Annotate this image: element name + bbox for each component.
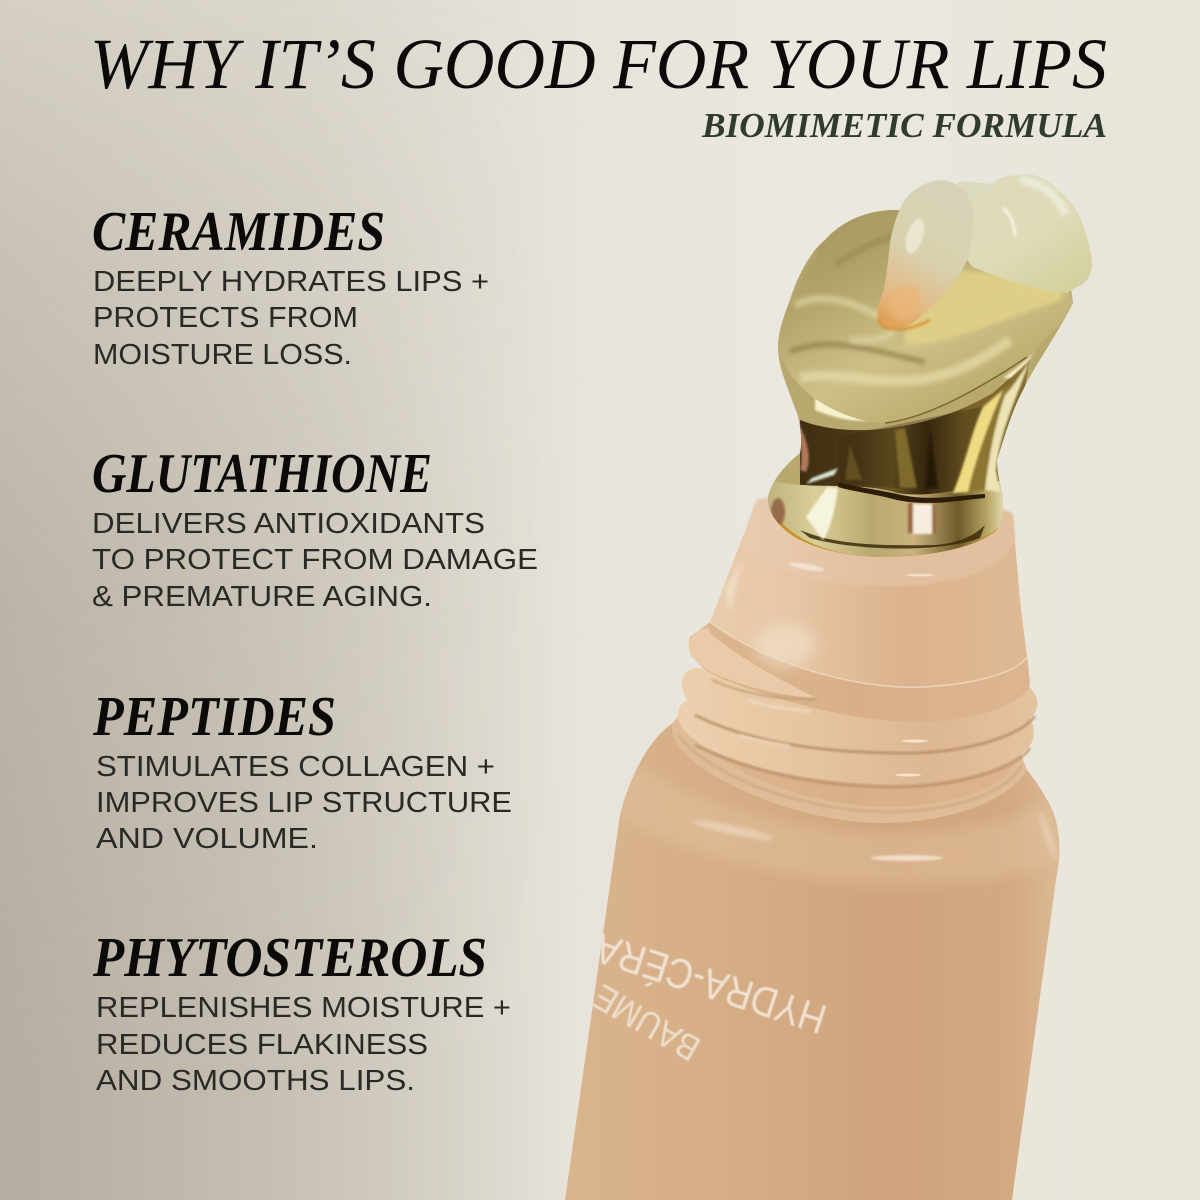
text: glutathione description: & PREMATURE AGING. (92, 581, 432, 613)
product: lip balm tube (565, 174, 1092, 1200)
shoulder collar (672, 700, 1027, 823)
ring 3 (678, 700, 1034, 784)
shoulder and neck rings (672, 622, 1038, 823)
panel: ceramides (92, 201, 489, 371)
subtitle: BIOMIMETIC FORMULA (701, 106, 1107, 145)
panel: peptides (92, 686, 512, 855)
recess below rings (690, 730, 1030, 807)
text: ceramides description: DEEPLY HYDRATES LIPS + (93, 266, 489, 298)
text: phytosterols description: AND SMOOTHS LIPS. (96, 1065, 415, 1097)
text: phytosterols description (96, 992, 511, 1097)
product label text (592, 933, 826, 1062)
balm: front blob (877, 180, 973, 329)
text: phytosterols description: REPLENISHES MOISTURE + (96, 992, 511, 1024)
upper neck (710, 495, 1027, 687)
text: ceramides description: MOISTURE LOSS. (93, 339, 352, 371)
text: ceramides description (93, 266, 489, 371)
gold neck (800, 360, 1030, 500)
gold collar (768, 481, 1003, 556)
background (0, 0, 538, 1200)
tube body (565, 723, 1060, 1200)
text: peptides description: IMPROVES LIP STRUCTURE (96, 787, 512, 819)
neck rim (746, 495, 1015, 586)
product label text: HYDRA-CÉRAMIDES (480, 888, 832, 1043)
ring 2 (682, 668, 1038, 750)
heading: phytosterols: PHYTOSTEROLS (92, 927, 487, 989)
gold highlights (771, 350, 1035, 540)
product label text: BAUME (586, 976, 707, 1070)
text: glutathione description (92, 508, 538, 613)
dish surface (778, 200, 1073, 423)
panel: phytosterols (92, 927, 511, 1097)
text: ceramides description: PROTECTS FROM (93, 302, 358, 334)
heading: peptides: PEPTIDES (92, 686, 336, 748)
text: peptides description: STIMULATES COLLAGEN + (96, 751, 495, 783)
heading: ceramides: CERAMIDES (92, 201, 385, 263)
gold applicator (760, 200, 1080, 565)
heading: glutathione: GLUTATHIONE (92, 443, 432, 505)
text: phytosterols description: REDUCES FLAKINESS (96, 1029, 428, 1061)
balm on applicator (877, 174, 1092, 330)
band with thread (689, 622, 1030, 722)
balm: back lump (957, 174, 1092, 293)
title: WHY IT’S GOOD FOR YOUR LIPS (90, 24, 1107, 104)
text: glutathione description: TO PROTECT FROM DAMAGE (92, 544, 538, 576)
text: glutathione description: DELIVERS ANTIOXIDANTS (92, 508, 485, 540)
text: peptides description (96, 751, 512, 855)
panel: glutathione (92, 443, 538, 613)
text: peptides description: AND VOLUME. (96, 823, 318, 855)
